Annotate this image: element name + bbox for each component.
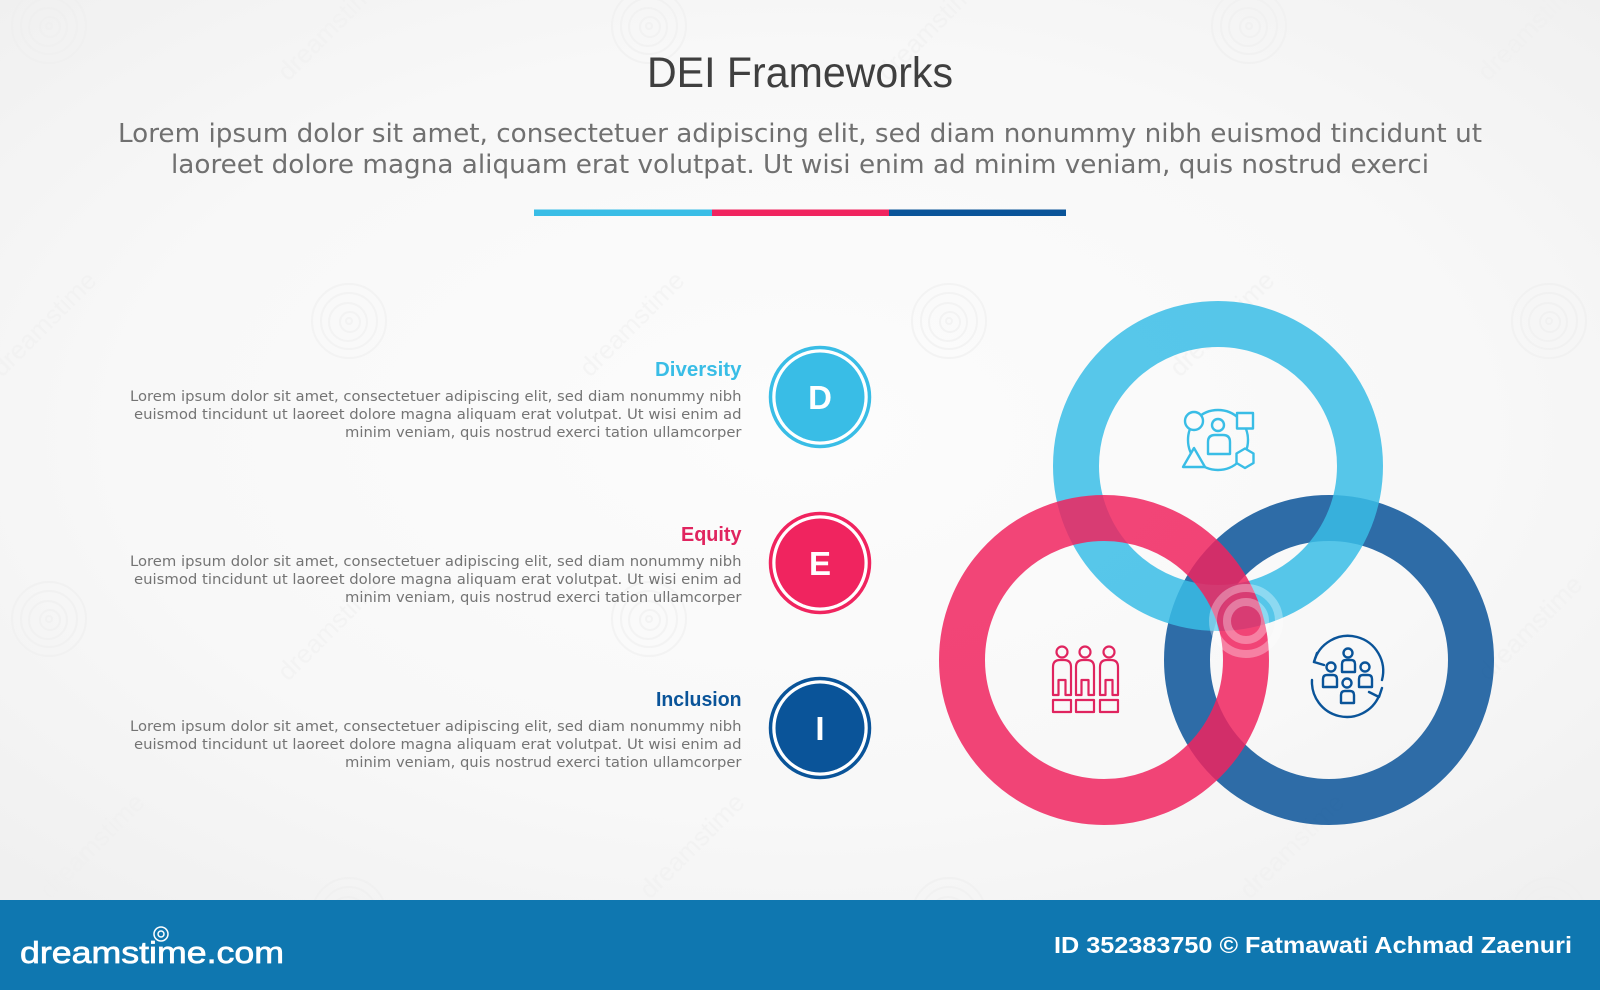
subtitle text xyxy=(118,119,1482,180)
badge: D: D xyxy=(808,379,832,416)
subtitle text: laoreet dolore magna aliquam erat volutpat. Ut wisi enim ad minim veniam, quis nostrud exerci xyxy=(171,150,1429,180)
title: DEI Frameworks xyxy=(647,49,953,97)
description: equity xyxy=(130,554,742,606)
watermark pattern: dreamstime xyxy=(633,787,750,904)
footer logo: dreamstime.com xyxy=(20,935,284,970)
description: diversity: minim veniam, quis nostrud exerci tation ullamcorper xyxy=(345,425,742,441)
description: diversity: euismod tincidunt ut laoreet dolore magna aliquam erat volutpat. Ut wisi enim ad xyxy=(134,407,742,423)
ring: equity xyxy=(962,518,1246,802)
description: inclusion: minim veniam, quis nostrud exerci tation ullamcorper xyxy=(345,755,742,771)
description: inclusion: euismod tincidunt ut laoreet dolore magna aliquam erat volutpat. Ut wisi enim ad xyxy=(134,737,742,753)
item: equity xyxy=(130,514,870,612)
badge: E: E xyxy=(809,545,831,582)
description: inclusion xyxy=(130,719,742,771)
item: diversity xyxy=(130,348,870,446)
watermark pattern: dreamstime xyxy=(33,787,150,904)
icon: inclusion xyxy=(1312,636,1383,717)
central watermark mark xyxy=(1213,588,1279,654)
badge: E xyxy=(770,514,870,612)
heading: equity: Equity xyxy=(681,524,742,546)
footer band xyxy=(0,900,1600,990)
badge: D xyxy=(770,348,870,446)
ring: inclusion xyxy=(1187,518,1471,802)
heading: inclusion: Inclusion xyxy=(656,689,742,711)
description: equity: Lorem ipsum dolor sit amet, consectetuer adipiscing elit, sed diam nonummy nibh xyxy=(130,554,742,570)
footer credit: ID 352383750 © Fatmawati Achmad Zaenuri xyxy=(1054,932,1572,958)
description: equity: euismod tincidunt ut laoreet dolore magna aliquam erat volutpat. Ut wisi enim ad xyxy=(134,572,742,588)
watermark pattern: dreamstime xyxy=(573,265,690,382)
tri-colour divider bar xyxy=(534,210,1066,216)
subtitle text: Lorem ipsum dolor sit amet, consectetuer adipiscing elit, sed diam nonummy nibh euismod tincidunt ut xyxy=(118,119,1482,149)
description: diversity xyxy=(130,389,742,441)
description: equity: minim veniam, quis nostrud exerci tation ullamcorper xyxy=(345,590,742,606)
watermark pattern: dreamstime xyxy=(271,569,388,686)
description: inclusion: Lorem ipsum dolor sit amet, consectetuer adipiscing elit, sed diam nonummy nibh xyxy=(130,719,742,735)
heading: diversity: Diversity xyxy=(655,359,742,381)
ring: diversity xyxy=(1076,324,1360,608)
icon: equity xyxy=(1053,646,1118,712)
description: diversity: Lorem ipsum dolor sit amet, consectetuer adipiscing elit, sed diam nonummy nibh xyxy=(130,389,742,405)
badge: I: I xyxy=(815,710,825,747)
badge: I xyxy=(770,678,870,778)
icon: diversity xyxy=(1183,410,1254,470)
watermark pattern: dreamstime xyxy=(1163,265,1280,382)
item: inclusion xyxy=(130,678,870,778)
watermark pattern: dreamstime xyxy=(1233,787,1350,904)
watermark pattern: dreamstime xyxy=(1471,569,1588,686)
venn diagram xyxy=(962,324,1471,802)
